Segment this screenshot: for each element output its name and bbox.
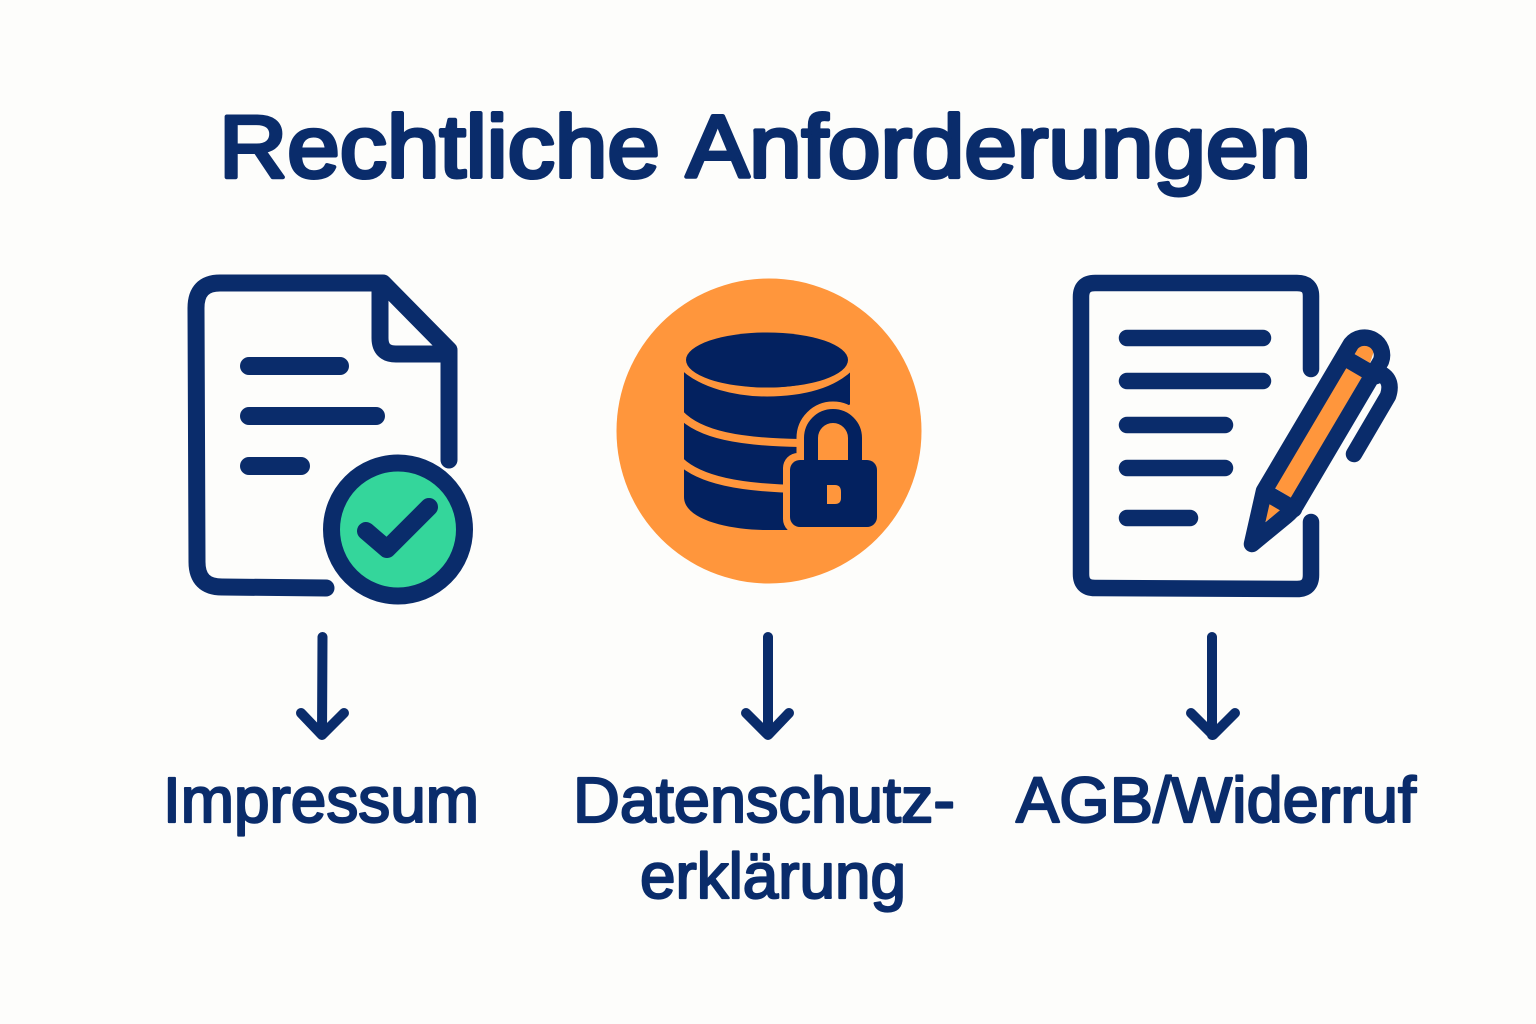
arrow: contract to AGB/Widerruf	[1191, 637, 1235, 735]
arrow: database to Datenschutzerklärung	[746, 637, 789, 735]
badge: green check circle	[332, 463, 464, 596]
label: Datenschutzerklärung: erklärung	[640, 840, 906, 912]
icon: database with padlock on orange circle	[616, 278, 922, 584]
arrow: document to Impressum	[301, 637, 344, 735]
label: Impressum: Impressum	[163, 764, 479, 836]
database cylinder	[680, 332, 856, 535]
icon: document with check mark	[196, 283, 464, 596]
icon: contract document with pen	[1081, 283, 1390, 589]
padlock	[783, 416, 884, 534]
title: Rechtliche Anforderungen	[219, 97, 1311, 196]
label: Datenschutzerklärung: Datenschutz-	[573, 764, 955, 836]
label: Datenschutzerklärung	[573, 764, 955, 912]
pen	[1252, 338, 1390, 544]
label: AGB/Widerruf: AGB/Widerruf	[1016, 764, 1416, 836]
